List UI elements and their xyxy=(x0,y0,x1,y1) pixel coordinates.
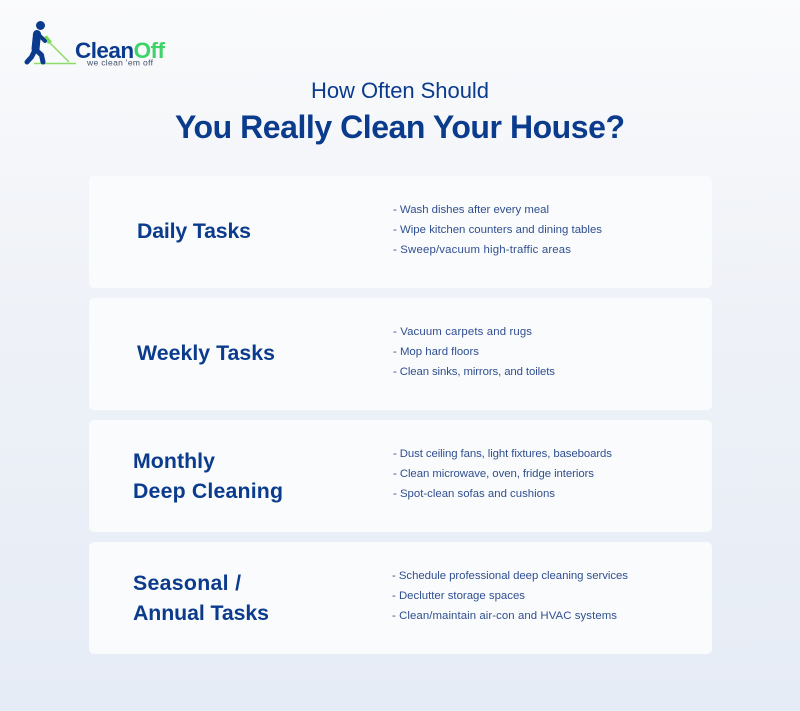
task list: seasonal xyxy=(392,570,628,622)
heading: seasonal annual tasks: Annual Tasks xyxy=(133,601,269,625)
heading: seasonal annual tasks: Seasonal / xyxy=(133,571,241,595)
panel: daily tasks xyxy=(89,176,712,288)
task list: monthly xyxy=(393,448,612,500)
task list: daily: - Sweep/vacuum high-traffic areas xyxy=(393,244,571,256)
task list: seasonal: - Declutter storage spaces xyxy=(392,590,525,602)
task list: daily: - Wipe kitchen counters and dining tables xyxy=(393,224,602,236)
title xyxy=(175,78,625,145)
panel: monthly deep cleaning xyxy=(89,420,712,532)
heading: weekly tasks: Weekly Tasks xyxy=(137,341,275,365)
task list: weekly: - Mop hard floors xyxy=(393,346,479,358)
logo: CleanOff xyxy=(27,21,166,68)
task list: monthly: - Spot-clean sofas and cushions xyxy=(393,488,555,500)
task list: monthly: - Clean microwave, oven, fridge interiors xyxy=(393,468,594,480)
task list: seasonal: - Clean/maintain air-con and HVAC systems xyxy=(392,610,617,622)
task list: weekly: - Clean sinks, mirrors, and toilets xyxy=(393,366,555,378)
icon: person mopping xyxy=(27,21,76,64)
heading: daily tasks: Daily Tasks xyxy=(137,219,251,243)
heading: seasonal annual tasks xyxy=(133,571,269,625)
heading: monthly deep cleaning: Monthly xyxy=(133,449,215,473)
title line 1: How Often Should xyxy=(311,78,489,103)
task list: weekly: - Vacuum carpets and rugs xyxy=(393,326,532,338)
heading: monthly deep cleaning xyxy=(133,449,283,503)
wordmark: CleanOff xyxy=(75,38,166,63)
task list: monthly: - Dust ceiling fans, light fixtures, baseboards xyxy=(393,448,612,460)
heading: monthly deep cleaning: Deep Cleaning xyxy=(133,479,283,503)
task list: daily: - Wash dishes after every meal xyxy=(393,204,549,216)
task list: seasonal: - Schedule professional deep cleaning services xyxy=(392,570,628,582)
title line 2: You Really Clean Your House? xyxy=(175,109,625,145)
task list: daily xyxy=(393,204,602,256)
tagline: we clean 'em off xyxy=(86,58,154,68)
panel: seasonal annual tasks xyxy=(89,542,712,654)
task list: weekly xyxy=(393,326,555,378)
panel: weekly tasks xyxy=(89,298,712,410)
